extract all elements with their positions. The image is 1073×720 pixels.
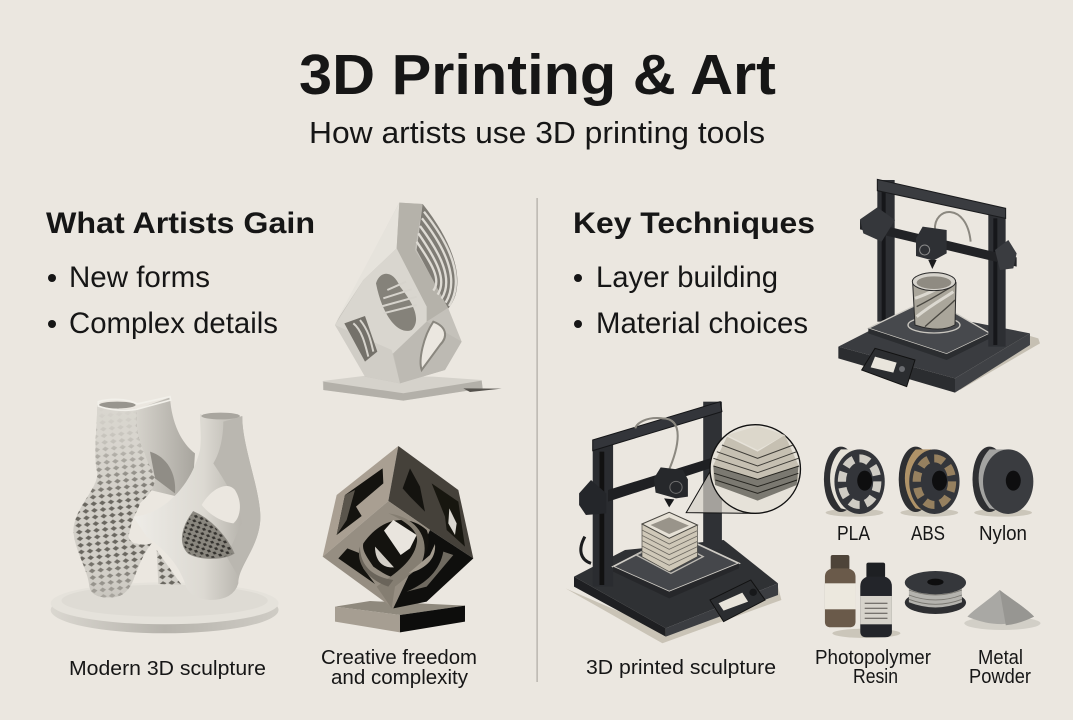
cube stand [335, 601, 465, 615]
icon: metal powder pile [964, 590, 1040, 630]
panel: key techniques [566, 179, 1040, 688]
illustration: modern 3D sculpture [51, 397, 279, 633]
heading: key techniques: Key Techniques [573, 207, 815, 240]
material labels: PLA [837, 523, 871, 545]
caption: creative freedom: Creative freedom [321, 647, 477, 669]
bullet list: techniques: Layer building [596, 261, 778, 294]
divider [536, 198, 538, 682]
back tube [136, 397, 195, 500]
cube windows [337, 468, 383, 535]
material labels: Nylon [979, 523, 1027, 545]
material labels: Photopolymer [815, 647, 931, 669]
illustration: faceted sculpture with slats [323, 203, 502, 401]
bullet list: gains [48, 261, 278, 340]
illustration: lattice cube [323, 446, 473, 632]
material labels: ABS [911, 523, 945, 545]
caption: creative freedom: and complexity [331, 667, 468, 689]
icon: resin bottles [825, 555, 900, 638]
material labels: Powder [969, 666, 1031, 688]
illustration: printer with layered print and magnifier [566, 402, 800, 643]
caption: 3D printed sculpture: 3D printed sculpture [586, 657, 776, 679]
icon group: material spools [824, 447, 1040, 638]
twin vases [73, 397, 260, 600]
bullet list: gains: New forms [69, 261, 210, 294]
icon: flat spool [905, 571, 966, 614]
illustration: printer with twisted vase [838, 179, 1040, 393]
material labels [815, 523, 1031, 688]
caption: modern 3D sculpture: Modern 3D sculpture [69, 658, 266, 680]
bullet list: gains: Complex details [69, 307, 278, 340]
caption: creative freedom [321, 647, 477, 689]
pedestal [51, 582, 279, 633]
icon: PLA spool [824, 447, 885, 514]
material labels: Metal [978, 647, 1023, 669]
icon: Nylon spool [972, 447, 1033, 514]
lattice vase [73, 405, 155, 597]
bullet list: techniques [574, 261, 808, 340]
icon: ABS spool [899, 447, 960, 514]
title: 3D Printing & Art [299, 43, 776, 107]
front vase [133, 414, 260, 600]
subtitle: How artists use 3D printing tools [309, 115, 765, 150]
cube frame [323, 446, 398, 557]
panel: what artists gain [46, 203, 502, 689]
material labels: Resin [853, 666, 898, 688]
magnifier: layer detail [710, 425, 800, 513]
bullet list: techniques: Material choices [596, 307, 808, 340]
heading: what artists gain: What Artists Gain [46, 207, 315, 240]
